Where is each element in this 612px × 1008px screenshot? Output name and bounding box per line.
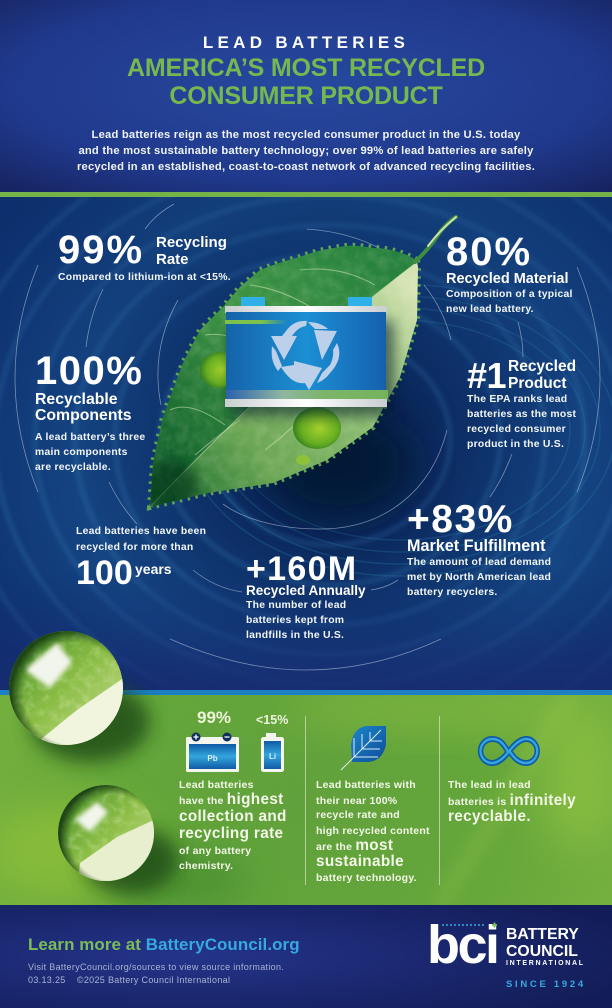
stat: 99% recycling rate: Recycling (156, 234, 227, 251)
label: 99%: 99% (197, 708, 231, 727)
logo: BCI: INTERNATIONAL (506, 960, 585, 967)
panel: most sustainable: Lead batteries with (316, 779, 416, 791)
logo: BCI (427, 915, 586, 990)
battery (225, 297, 394, 416)
stat: +83% market fulfillment: +83% (407, 498, 514, 541)
panel: infinitely recyclable: batteries is infinitely (448, 792, 576, 809)
panel: infinitely recyclable: recyclable. (448, 808, 531, 825)
panel: most sustainable: recycle rate and (316, 809, 400, 821)
stat: 100 years: years (135, 561, 172, 577)
icon: batteries Pb and Li: Pb (207, 754, 218, 763)
stat: 99% recycling rate: Compared to lithium-ion at <15%. (58, 272, 231, 283)
stat: 100% recyclable components: Recyclable (35, 391, 118, 408)
logo: BCI: COUNCIL (506, 943, 578, 960)
water drops on leaf (200, 352, 240, 388)
icon: leaf (340, 726, 386, 770)
logo: BCI: SINCE 1924 (506, 979, 586, 990)
leaf (142, 217, 456, 520)
panel: infinitely recyclable: The lead in lead (448, 779, 531, 791)
leaf with battery illustration (146, 214, 458, 511)
panel: highest collection and recycling rate: have the highest (179, 791, 284, 808)
stat: 100% recyclable components (35, 349, 145, 473)
stat: #1 recycled product: #1 (467, 355, 506, 396)
stem (415, 217, 456, 262)
header background (0, 0, 612, 193)
stat: #1 recycled product: product in the U.S. (467, 439, 564, 450)
title (127, 54, 485, 110)
stat: 80% recycled material (446, 230, 573, 315)
panel: highest collection and recycling rate: collection and (179, 808, 287, 825)
intro text: and the most sustainable battery technology; over 99% of lead batteries are safely (78, 145, 534, 157)
stat: +83% market fulfillment: battery recyclers. (407, 587, 498, 598)
stat: 80% recycled material: 80% (446, 230, 532, 274)
stat: 100 years (76, 526, 206, 592)
stat: 100% recyclable components: 100% (35, 349, 143, 393)
stat: 100% recyclable components: main components (35, 447, 128, 458)
panel: most sustainable: their near 100% (316, 795, 397, 807)
stat: #1 recycled product: Product (508, 375, 567, 392)
stat: +83% market fulfillment (407, 498, 551, 598)
footer background (0, 905, 612, 1008)
footer notes: 03.13.25 ©2025 Battery Council International (28, 975, 230, 985)
panel: most sustainable: high recycled content (316, 825, 430, 837)
title: CONSUMER PRODUCT (169, 82, 443, 110)
stat: 99% recycling rate (58, 228, 231, 283)
panel: highest collection and recycling rate (179, 708, 288, 872)
green lower background (0, 688, 612, 910)
water drop: large (9, 631, 187, 904)
stat: 100% recyclable components: are recyclable. (35, 462, 111, 473)
stat: 80% recycled material: new lead battery. (446, 304, 534, 315)
stat: 100 years: 100 (76, 554, 133, 592)
stat: 100 years: Lead batteries have been (76, 526, 206, 537)
stat: #1 recycled product: batteries as the most (467, 409, 576, 420)
stat: 80% recycled material: Composition of a typical (446, 289, 573, 300)
panel: highest collection and recycling rate: chemistry. (179, 860, 233, 872)
ripple water background (0, 197, 612, 690)
panel: highest collection and recycling rate: recycling rate (179, 825, 283, 842)
stat: #1 recycled product: recycled consumer (467, 424, 566, 435)
footer notes (28, 962, 284, 985)
logo: BCI: bci (427, 915, 498, 975)
panel: most sustainable: are the most (316, 837, 393, 854)
label: under 15%: <15% (256, 713, 288, 727)
icon: recycle arrows (271, 321, 339, 390)
stat: 99% recycling rate: Rate (156, 251, 189, 268)
footer notes: Visit BatteryCouncil.org/sources to view source information. (28, 962, 284, 972)
stat: 100% recyclable components: A lead battery’s three (35, 432, 145, 443)
stat: +160M recycled annually: +160M (246, 550, 357, 588)
stat: +160M recycled annually (246, 550, 366, 641)
stat: 100% recyclable components: Components (35, 407, 132, 424)
stat: +160M recycled annually: The number of lead (246, 600, 346, 611)
stat: #1 recycled product (467, 355, 576, 450)
intro text: Lead batteries reign as the most recycled consumer product in the U.S. today (92, 129, 520, 141)
intro text (77, 129, 535, 173)
stat: +83% market fulfillment: Market Fulfillment (407, 537, 546, 555)
stat: #1 recycled product: The EPA ranks lead (467, 394, 567, 405)
icon: batteries Pb and Li: Li (269, 752, 276, 761)
stat: +83% market fulfillment: met by North American lead (407, 572, 551, 583)
icon: batteries Pb and Li (186, 732, 284, 772)
panel: most sustainable (316, 726, 430, 884)
panel: highest collection and recycling rate: Lead batteries (179, 779, 254, 791)
logo: BCI: BATTERY (506, 926, 579, 943)
panel: most sustainable: sustainable (316, 853, 404, 870)
icon: infinity loop (478, 736, 540, 766)
title: AMERICA’S MOST RECYCLED (127, 54, 485, 82)
stat: +83% market fulfillment: The amount of lead demand (407, 557, 551, 568)
stat: 100 years: recycled for more than (76, 542, 194, 553)
intro text: recycled in an established, coast-to-coast network of advanced recycling facilities. (77, 161, 535, 173)
logo dotted accent (442, 922, 497, 928)
blue strip (0, 690, 612, 695)
call to action: Learn more at BatteryCouncil.org (28, 935, 300, 954)
panel: infinitely recyclable (448, 736, 576, 825)
stat: +160M recycled annually: landfills in the U.S. (246, 630, 344, 641)
section label: lead batteries: LEAD BATTERIES (203, 33, 409, 52)
stat: 80% recycled material: Recycled Material (446, 271, 569, 287)
stat: 99% recycling rate: 99% (58, 228, 144, 272)
thin arcs (15, 204, 600, 670)
stat: +160M recycled annually: Recycled Annually (246, 583, 366, 598)
stat: #1 recycled product: Recycled (508, 358, 576, 375)
green strip (0, 192, 612, 197)
water drop: small (55, 780, 178, 894)
stat: +160M recycled annually: batteries kept from (246, 615, 344, 626)
panel: most sustainable: battery technology. (316, 872, 417, 884)
panel: highest collection and recycling rate: of any battery (179, 845, 251, 857)
